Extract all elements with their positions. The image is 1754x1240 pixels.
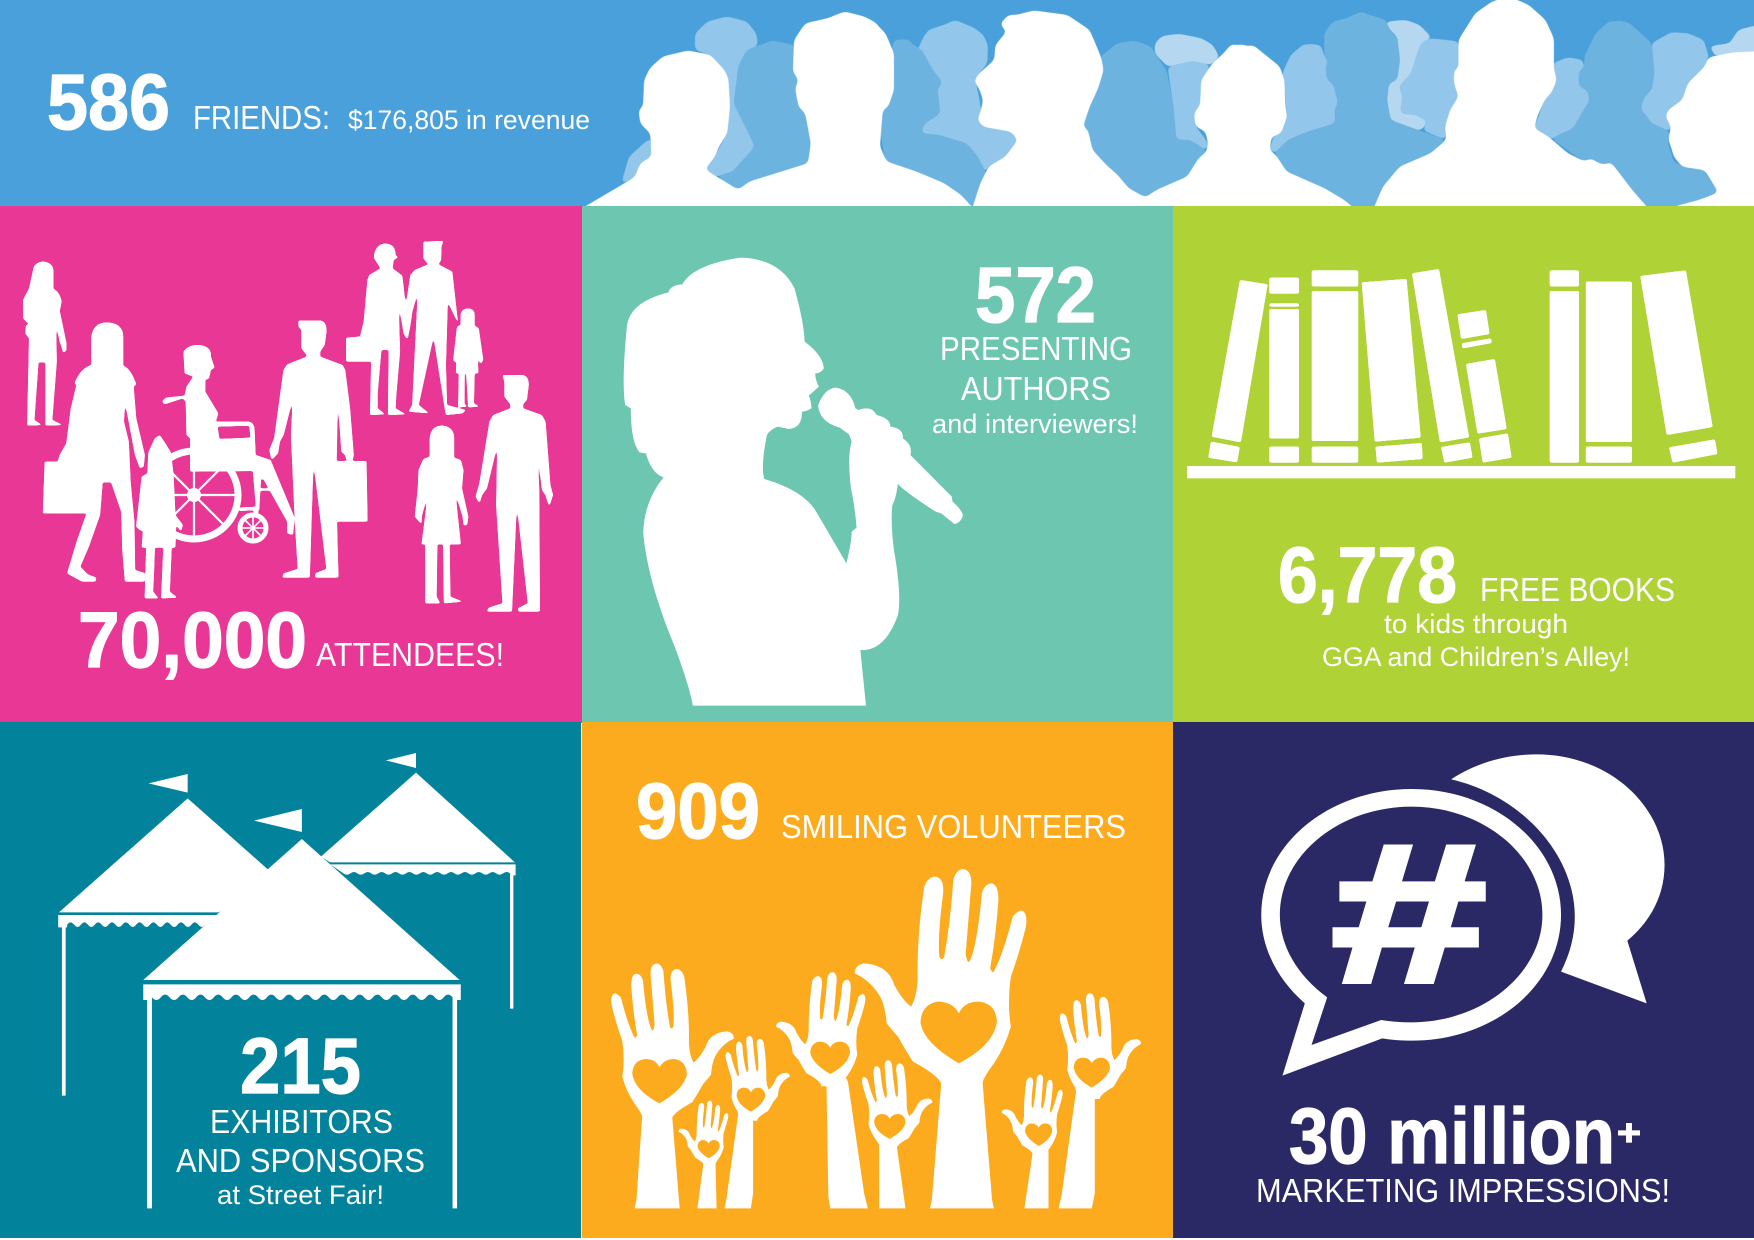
icon: speech bubbles bbox=[1261, 754, 1665, 1076]
label: and sponsors: AND SPONSORS bbox=[176, 1142, 425, 1179]
stat: 6,778: 6,778 bbox=[1278, 530, 1457, 619]
label: exhibitors: EXHIBITORS bbox=[210, 1103, 393, 1140]
label: GGA and Children's Alley: GGA and Children’s Alley! bbox=[1322, 642, 1630, 672]
label: presenting: PRESENTING bbox=[940, 330, 1132, 367]
icon: speaker with microphone bbox=[624, 258, 963, 706]
people silhouettes bbox=[23, 241, 553, 612]
hash symbol: # bbox=[1332, 804, 1486, 1023]
plus sign: + bbox=[1617, 1112, 1641, 1153]
stat: 30 million: 30 million bbox=[1289, 1091, 1615, 1180]
label: at street fair: at Street Fair! bbox=[217, 1180, 384, 1210]
panel: exhibitors bbox=[0, 722, 581, 1238]
panel: free books bbox=[1173, 206, 1754, 723]
panel: friends banner bbox=[0, 0, 1754, 213]
label: friends: FRIENDS: bbox=[193, 99, 330, 136]
wheelchair wheels bbox=[150, 451, 266, 541]
panel: volunteers bbox=[582, 722, 1173, 1238]
crowd silhouettes bbox=[574, 0, 1754, 213]
panel: marketing impressions bbox=[1173, 722, 1754, 1238]
stat: 586: 586 bbox=[47, 57, 170, 146]
label: free books: FREE BOOKS bbox=[1480, 571, 1675, 608]
icon: tents bbox=[58, 753, 516, 1208]
label: attendees: ATTENDEES! bbox=[316, 636, 504, 673]
label: smiling volunteers: SMILING VOLUNTEERS bbox=[781, 808, 1126, 845]
label: authors: AUTHORS bbox=[961, 370, 1111, 407]
icon: raised hands with hearts bbox=[611, 869, 1141, 1208]
label: marketing impressions: MARKETING IMPRESSIONS! bbox=[1256, 1172, 1670, 1209]
panel: attendees bbox=[0, 206, 582, 723]
stat: 572: 572 bbox=[975, 250, 1096, 339]
stat: 215: 215 bbox=[240, 1021, 361, 1110]
label: and interviewers: and interviewers! bbox=[932, 409, 1138, 439]
stat: 909: 909 bbox=[636, 766, 760, 855]
stat: 70,000: 70,000 bbox=[78, 595, 307, 684]
panel: presenting authors bbox=[582, 206, 1173, 723]
icon: bookshelf bbox=[1187, 269, 1735, 478]
label: revenue: $176,805 in revenue bbox=[348, 105, 590, 135]
label: to kids through: to kids through bbox=[1384, 609, 1568, 639]
